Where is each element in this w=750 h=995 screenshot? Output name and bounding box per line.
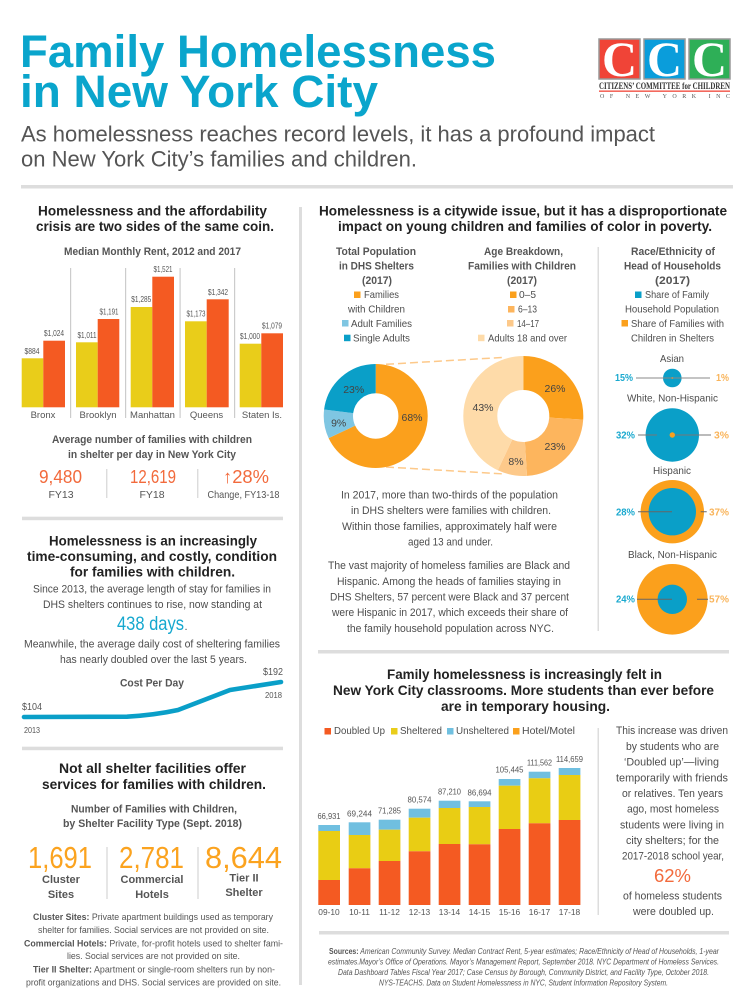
text block: donut explanation: The vast majority of homeless families are Black and [328, 560, 570, 572]
legend: race and ethnicity: Race/Ethnicity of [631, 246, 715, 258]
text block: donut explanation: in DHS shelters were families with children. [351, 505, 551, 517]
stacked bar chart: students in temporary housing: 66,931 [318, 811, 341, 821]
subheading: families per day [52, 434, 252, 461]
title [20, 26, 496, 117]
text block: doubled up explanation: temporarily with friends [616, 772, 728, 784]
circle: Hispanic [616, 465, 730, 543]
circle: Hispanic: 28% [616, 507, 636, 519]
stats: families per day: FY13 [48, 489, 74, 501]
legend: age breakdown: Families with Children [468, 260, 576, 272]
heading: classrooms: Family homelessness is increasingly felt in [387, 666, 662, 682]
stats: facility type: 1,691 [28, 840, 92, 875]
donut chart: age breakdown: 43% [472, 402, 494, 414]
subheading: families per day: Average number of families with children [52, 434, 252, 446]
heading: shelter facilities: services for families with children. [42, 776, 266, 792]
legend: race and ethnicity: Household Population [625, 304, 719, 316]
bar chart: median monthly rent: $1,342 [208, 288, 228, 297]
bar chart: median monthly rent: $1,173 [186, 310, 206, 319]
text block: length of stay: . [184, 621, 188, 633]
legend: student housing [324, 725, 575, 737]
stats: facility type: 8,644 [205, 840, 282, 875]
legend: age breakdown [468, 246, 576, 345]
stats: families per day: ↑28% [223, 466, 269, 487]
bar chart: median monthly rent: Brooklyn [80, 410, 116, 421]
bar chart: median monthly rent: Manhattan [130, 410, 175, 421]
circle: Black, Non-Hispanic: Black, Non-Hispanic [628, 549, 717, 561]
panel: shelter facilities [24, 760, 283, 989]
text block: donut explanation: were Hispanic in 2017, which exceeds their share of [331, 607, 569, 619]
text block: length of stay [24, 584, 280, 666]
line chart: cost per day: $104 [22, 701, 42, 713]
bar chart: median monthly rent: $1,191 [100, 308, 118, 317]
text block: length of stay: has nearly doubled over the last 5 years. [60, 654, 247, 666]
panel: length of stay and cost [22, 533, 283, 735]
text block: facility definitions: lies. Social services are not provided on site. [67, 951, 240, 962]
legend: total population: in DHS Shelters [339, 260, 414, 272]
donut chart: total population: 68% [401, 412, 423, 424]
text block: donut explanation [328, 489, 570, 635]
line chart: cost per day: Cost Per Day [120, 678, 185, 690]
line chart: cost per day: 2013 [24, 725, 40, 735]
stacked bar chart: students in temporary housing [318, 754, 583, 917]
text block: facility definitions: profit organizations and DHS. Social services are provided on site. [26, 978, 281, 989]
stacked bar chart: students in temporary housing: 14-15 [469, 907, 491, 917]
donut chart: total population: 23% [343, 384, 364, 396]
stacked bar chart: students in temporary housing: 114,659 [556, 754, 583, 764]
legend: total population: Families [364, 289, 399, 301]
legend: student housing: Doubled Up [334, 725, 385, 737]
chart title: facility type: Number of Families with Children, [71, 804, 237, 816]
heading: citywide issue [319, 203, 727, 234]
legend: age breakdown: 14–17 [517, 318, 539, 330]
donut chart: age breakdown: 8% [508, 456, 524, 468]
heading: classrooms: New York City classrooms. More students than ever before [333, 682, 714, 698]
text block: facility definitions [24, 912, 283, 989]
text block: donut explanation: aged 13 and under. [408, 537, 493, 549]
subtitle: on New York City’s families and children. [21, 146, 417, 172]
circle: Asian [615, 353, 730, 387]
donut chart: total population [331, 379, 423, 453]
legend: student housing: Unsheltered [456, 725, 509, 737]
legend: race and ethnicity: Share of Family [645, 289, 710, 301]
circle: Black, Non-Hispanic: 57% [709, 594, 730, 606]
bar chart: median monthly rent: $1,024 [44, 329, 65, 338]
bar chart: median monthly rent: Queens [190, 410, 223, 421]
logo: Citizens' Committee for Children: C [647, 31, 682, 87]
stacked bar chart: students in temporary housing: 11-12 [379, 907, 400, 917]
legend: student housing: Hotel/Motel [522, 725, 575, 737]
logo: Citizens' Committee for Children: OF NEW YORK INC [600, 94, 730, 100]
line chart: cost per day: 2018 [265, 690, 282, 700]
bar chart: median monthly rent: Staten Is. [242, 410, 282, 421]
stats: facility type: Cluster [42, 874, 81, 886]
stacked bar chart: students in temporary housing: 105,445 [496, 765, 524, 775]
legend: race and ethnicity: Share of Families with [631, 318, 724, 330]
stats: facility type: Commercial [121, 874, 183, 886]
circle: White, Non-Hispanic [616, 393, 730, 462]
heading: citywide issue: Homelessness is a citywide issue, but it has a disproportionate [319, 203, 727, 219]
text block: facility definitions: Tier II Shelter: Apartment or single-room shelters run by non- [33, 965, 275, 976]
bar chart: median monthly rent: $1,000 [240, 332, 261, 341]
legend: race and ethnicity [598, 246, 724, 631]
stacked bar chart: students in temporary housing: 69,244 [347, 808, 372, 818]
circle: Black, Non-Hispanic [616, 549, 730, 635]
text block: doubled up explanation: 2017-2018 school year, [622, 851, 724, 863]
chart title: facility type: by Shelter Facility Type (Sept. 2018) [63, 818, 242, 830]
stacked bar chart: students in temporary housing: 80,574 [408, 795, 432, 805]
heading: classrooms [333, 666, 714, 714]
bar chart: median monthly rent: $884 [24, 347, 40, 356]
stacked bar chart: students in temporary housing: 13-14 [439, 907, 461, 917]
stats: facility type: Shelter [225, 887, 263, 899]
text block: doubled up explanation: 62% [654, 865, 691, 886]
stacked bar chart: students in temporary housing: 71,285 [378, 806, 401, 816]
stacked bar chart: students in temporary housing: 12-13 [409, 907, 431, 917]
stats: facility type: Tier II [229, 873, 259, 885]
circle: Hispanic: Hispanic [653, 465, 691, 477]
stats: facility type [28, 840, 282, 901]
logo: Citizens' Committee for Children: C [692, 31, 727, 87]
stats: facility type: 2,781 [119, 840, 184, 875]
stats: families per day: 9,480 [39, 466, 82, 487]
donut chart: total population: 9% [331, 418, 346, 430]
text block: doubled up explanation: of homeless students [623, 890, 722, 902]
text block: doubled up explanation: or relatives. Ten years [622, 788, 723, 800]
text block: length of stay: Meanwhile, the average daily cost of sheltering families [24, 639, 280, 651]
subtitle: As homelessness reaches record levels, it has a profound impact [21, 122, 656, 146]
heading: time-consuming and costly: for families with children. [70, 564, 235, 580]
heading: time-consuming and costly: Homelessness is an increasingly [49, 533, 257, 549]
bar chart: median monthly rent: $1,521 [154, 265, 172, 274]
donut chart: age breakdown: 26% [544, 383, 566, 395]
stats: families per day: 12,619 [130, 466, 176, 487]
sources [328, 947, 719, 988]
text block: donut explanation: Hispanic. Among the heads of families staying in [337, 576, 561, 588]
stacked bar chart: students in temporary housing: 16-17 [529, 907, 551, 917]
heading: time-consuming and costly: time-consuming, and costly, condition [27, 548, 277, 564]
stats: facility type: Sites [48, 889, 74, 901]
panel: rent and affordability [22, 203, 283, 501]
title: Family Homelessness [20, 26, 496, 77]
chart title: median rent: Median Monthly Rent, 2012 and 2017 [64, 246, 241, 258]
legend: total population: Total Population [336, 246, 416, 258]
line chart: cost per day [22, 666, 283, 735]
stacked bar chart: students in temporary housing: 15-16 [499, 907, 521, 917]
title: in New York City [20, 66, 378, 117]
heading: affordability: Homelessness and the affordability [38, 203, 267, 219]
legend: age breakdown: (2017) [507, 275, 537, 287]
circle: White, Non-Hispanic: White, Non-Hispanic [627, 393, 718, 405]
text block: length of stay: Since 2013, the average length of stay for families in [33, 584, 271, 596]
panel: citywide issue [319, 203, 730, 635]
text block: doubled up explanation: ago, most homeless [627, 804, 719, 816]
logo: Citizens' Committee for Children [599, 31, 730, 100]
stacked bar chart: students in temporary housing: 111,562 [527, 758, 552, 768]
legend: total population: Single Adults [353, 333, 410, 345]
bar chart: median monthly rent: $1,079 [262, 322, 282, 331]
stacked bar chart: students in temporary housing: 87,210 [438, 787, 461, 797]
legend: total population [336, 246, 416, 345]
legend: age breakdown: 0–5 [519, 289, 536, 301]
text block: facility definitions: shelter for families. Social services are not provided on site. [38, 925, 269, 936]
circle: Hispanic: 37% [709, 507, 730, 519]
stats: facility type: Hotels [135, 889, 169, 901]
stacked bar chart: students in temporary housing: 09-10 [318, 907, 340, 917]
panel: classrooms [318, 666, 728, 918]
text block: donut explanation: Within those families, approximately half were [342, 521, 557, 533]
stats: families per day: FY18 [139, 489, 165, 501]
subtitle [21, 122, 656, 172]
legend: race and ethnicity: Head of Households [624, 260, 721, 272]
heading: shelter facilities: Not all shelter facilities offer [59, 760, 247, 776]
text block: length of stay: 438 days [117, 614, 184, 635]
stats: families per day [39, 466, 280, 501]
heading: shelter facilities [42, 760, 266, 792]
text block: doubled up explanation: by students who are [626, 741, 719, 753]
text block: doubled up explanation: students were living in [620, 819, 724, 831]
subheading: families per day: in shelter per day in New York City [68, 449, 237, 461]
circle: White, Non-Hispanic: 3% [714, 430, 730, 442]
proportional circles: race and ethnicity [615, 353, 730, 635]
heading: time-consuming and costly [27, 533, 277, 580]
donut chart: age breakdown [472, 373, 566, 468]
text block: doubled up explanation: city shelters; for the [626, 835, 719, 847]
text block: length of stay: DHS shelters continues to rise, now standing at [43, 599, 262, 611]
legend: race and ethnicity: Children in Shelters [631, 333, 714, 345]
legend: total population: (2017) [362, 275, 392, 287]
chart title: facility type [63, 804, 242, 830]
heading: classrooms: are in temporary housing. [441, 698, 610, 714]
heading: citywide issue: impact on young children and families of color in poverty. [338, 218, 712, 234]
donut chart: age breakdown: 23% [544, 441, 566, 453]
text block: donut explanation: DHS Shelters, 57 percent were Black and 37 percent [330, 592, 569, 604]
logo: Citizens' Committee for Children: C [602, 31, 637, 87]
legend: total population: Adult Families [351, 318, 412, 330]
bar chart: median monthly rent: $1,285 [131, 295, 152, 304]
text block: donut explanation: In 2017, more than two-thirds of the population [341, 489, 558, 501]
circle: Asian: 15% [615, 372, 634, 384]
legend: total population: with Children [347, 304, 405, 316]
bar chart: median monthly rent: Bronx [31, 410, 56, 421]
circle: Black, Non-Hispanic: 24% [616, 594, 636, 606]
text block: facility definitions: Cluster Sites: Private apartment buildings used as temporary [33, 912, 273, 923]
text block: facility definitions: Commercial Hotels: Private, for-profit hotels used to shelter fami- [24, 939, 283, 950]
text block: doubled up explanation: This increase was driven [616, 725, 728, 737]
text block: donut explanation: the family household population across NYC. [347, 623, 554, 635]
text block: doubled up explanation [616, 725, 728, 918]
stacked bar chart: students in temporary housing: 86,694 [468, 787, 492, 797]
stats: families per day: Change, FY13-18 [208, 489, 280, 501]
line chart: cost per day: $192 [263, 666, 283, 678]
top divider [21, 185, 733, 188]
stacked bar chart: students in temporary housing: 10-11 [349, 907, 370, 917]
stacked bar chart: students in temporary housing: 17-18 [559, 907, 581, 917]
arrow: dashed connectors between donuts [386, 357, 505, 474]
circle: White, Non-Hispanic: 32% [616, 430, 636, 442]
legend: race and ethnicity: (2017) [655, 275, 690, 287]
circle: Asian: Asian [660, 353, 684, 365]
heading: affordability [36, 203, 274, 234]
bar chart: median monthly rent: $1,011 [78, 331, 96, 340]
sources: NYS-TEACHS. Data on Student Homelessness in NYC, Student Information Repository System. [379, 979, 668, 988]
heading: affordability: crisis are two sides of the same coin. [36, 218, 274, 234]
circle: Asian: 1% [716, 372, 730, 384]
text block: doubled up explanation: were doubled up. [632, 906, 714, 918]
legend: student housing: Sheltered [400, 725, 442, 737]
legend: age breakdown: Age Breakdown, [484, 246, 563, 258]
text block: doubled up explanation: ‘Doubled up’—living [624, 757, 719, 769]
bar chart: median monthly rent [22, 265, 283, 421]
legend: age breakdown: 6–13 [518, 304, 537, 316]
legend: age breakdown: Adults 18 and over [488, 333, 567, 345]
